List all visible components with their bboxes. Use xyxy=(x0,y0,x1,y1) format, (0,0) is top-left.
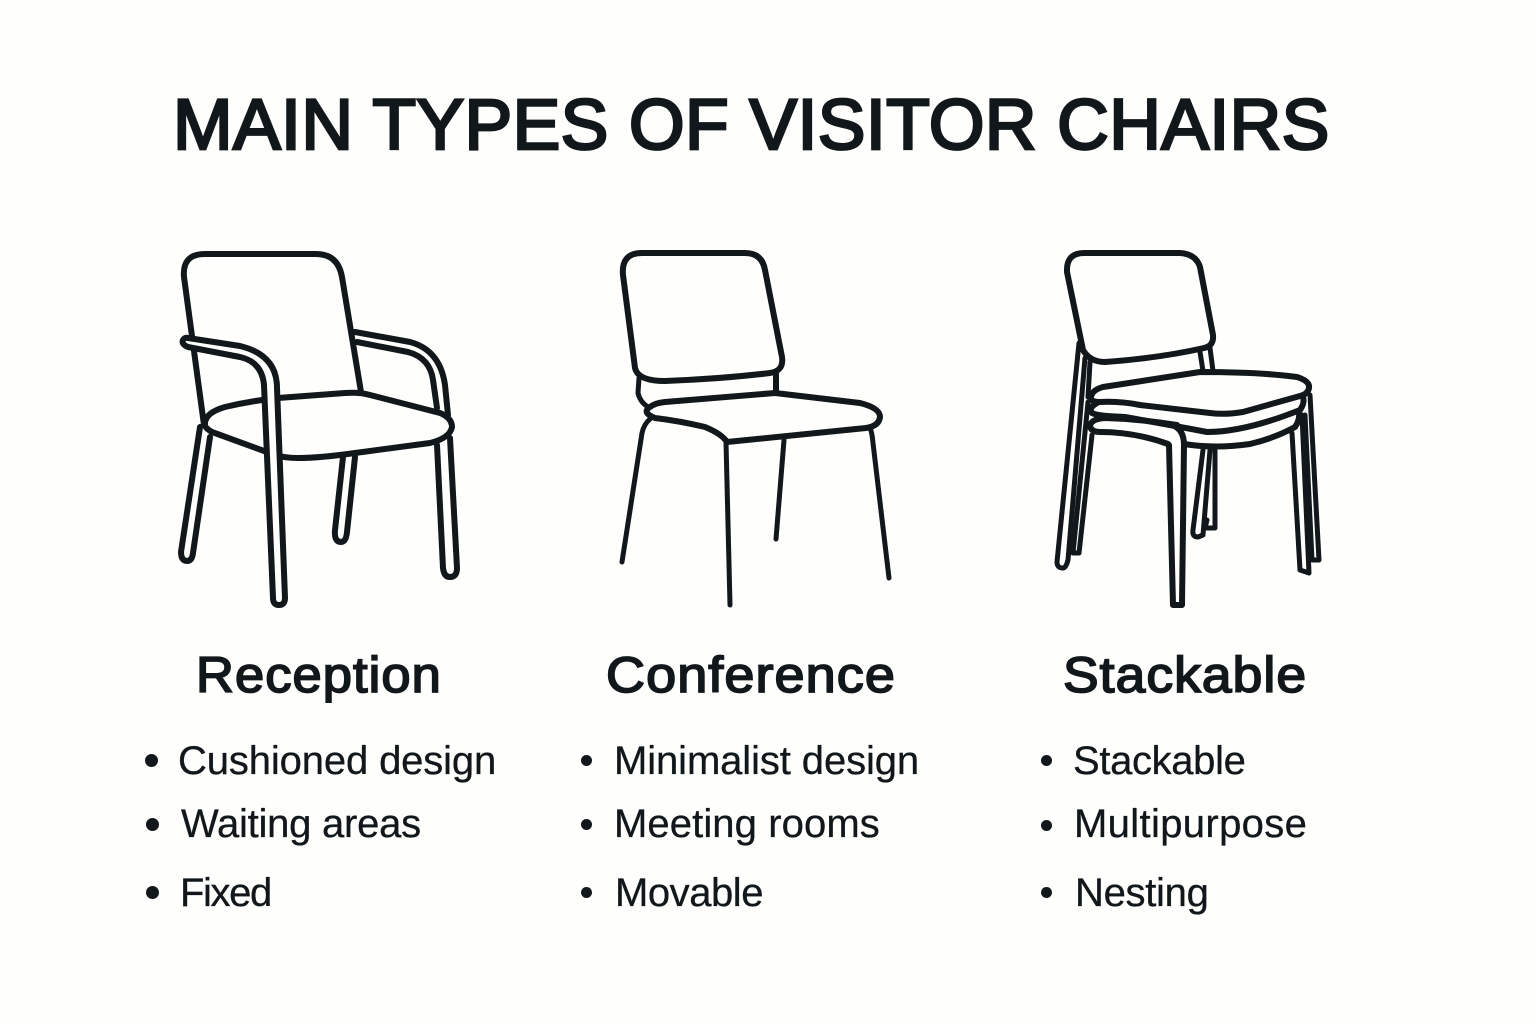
list: Stackable: Multipurpose xyxy=(1074,802,1307,846)
list: Conference: Meeting rooms xyxy=(614,802,880,846)
list: Conference: Movable xyxy=(615,870,763,914)
title: MAIN TYPES OF VISITOR CHAIRS xyxy=(173,85,1330,165)
list: Reception: Cushioned design xyxy=(178,738,496,782)
list: Conference xyxy=(581,738,919,914)
list: Stackable: Stackable xyxy=(1073,738,1246,782)
list: Reception: Fixed xyxy=(180,870,271,914)
heading: Conference: Conference xyxy=(606,647,896,703)
icon: stacked chairs xyxy=(1054,250,1322,608)
heading: Stackable: Stackable xyxy=(1063,647,1307,703)
list: Reception xyxy=(145,738,496,914)
icon: reception chair xyxy=(178,251,460,608)
list: Stackable: Nesting xyxy=(1075,870,1209,914)
list: Stackable xyxy=(1041,738,1307,915)
list: Reception: Waiting areas xyxy=(181,802,421,846)
icon: conference chair xyxy=(620,250,892,608)
heading: Reception: Reception xyxy=(196,647,442,703)
list: Conference: Minimalist design xyxy=(614,738,919,782)
